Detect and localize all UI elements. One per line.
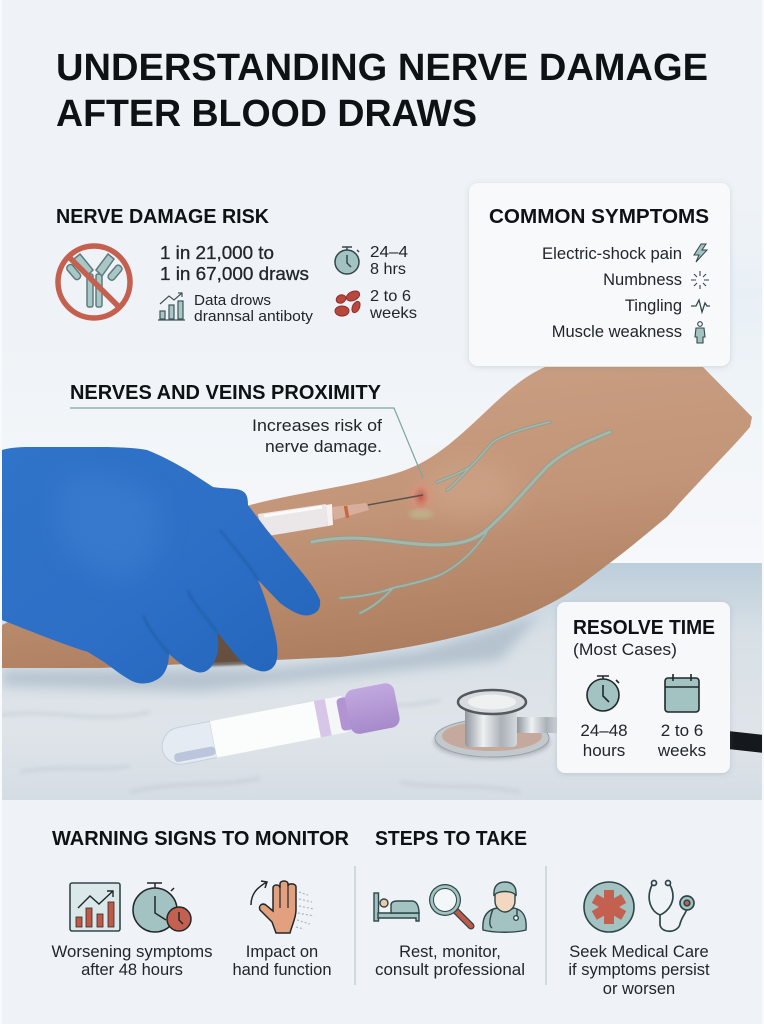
icon: numbness burst [691,271,709,289]
callout text: Increases risk of [252,417,382,435]
callout text: nerve damage. [265,438,382,456]
title [56,47,708,135]
arm [2,367,752,668]
symptom list: Numbness [603,271,682,289]
text: hand function: hand function [232,961,332,979]
statistic: incidence: 1 in 21,000 to [160,243,274,263]
icon: worsening chart [70,883,120,931]
callout heading: NERVES AND VEINS PROXIMITY [70,382,382,404]
text: rest monitor consult: Rest, monitor, [399,943,501,961]
statistic: incidence [160,243,309,284]
icon: antibody prohibited [58,246,130,318]
panel: steps to take [374,828,527,979]
statistic: incidence: 1 in 67,000 draws [160,264,309,284]
recovery text: weeks [369,305,417,322]
panel: nerve damage risk [56,206,417,325]
stethoscope on table [434,690,559,759]
icon: lightning [694,244,707,262]
icon: doctor [483,882,526,932]
callout text [252,417,382,456]
panel: warning signs to monitor [52,828,350,979]
title: UNDERSTANDING NERVE DAMAGE [56,47,708,89]
leader line [70,408,423,478]
icon: star of life [584,882,634,932]
photo: blood draw scene [2,367,762,800]
marble table [0,563,764,800]
subheading: (Most Cases) [573,640,677,659]
title: AFTER BLOOD DRAWS [56,93,477,135]
photo wall backdrop [0,340,764,570]
note text [194,293,314,325]
icon: tingling pulse [691,300,710,312]
stethoscope cord [730,731,762,753]
duration text: 24–4 [370,244,408,261]
icon: stopwatch [587,676,619,711]
syringe [258,495,423,537]
callout: nerves and veins proximity [70,382,423,478]
text: hand function [232,943,332,979]
icon: stethoscope [649,880,694,931]
text: hand function: Impact on [246,943,318,961]
heading: resolve time: RESOLVE TIME [573,617,715,639]
icon: rising bars [158,293,185,320]
divider [354,866,356,985]
text: worsening symptoms: after 48 hours [81,961,183,979]
icon: person [695,322,705,343]
symptom list: Tingling [625,297,682,315]
duration labels [580,721,706,760]
symptom list [542,245,682,341]
arm shadow on table [2,615,540,692]
duration labels: 24–48 [580,721,628,740]
icon: calendar [665,674,699,712]
symptom list: Electric-shock pain [542,245,682,263]
puncture glow [411,484,430,509]
note text: Data drows [194,293,271,309]
icon: hand [251,881,314,933]
icon: clock with alert clock [133,883,191,932]
panel: seek medical care [568,880,710,998]
icon: magnifier [429,884,471,926]
text: seek medical care [568,943,710,998]
icon: red blood cells [335,289,362,316]
symptom list: Muscle weakness [552,323,682,341]
heading: steps to take: STEPS TO TAKE [375,828,527,850]
heading: warning signs: WARNING SIGNS TO MONITOR [52,828,350,850]
text: rest monitor consult [375,943,525,979]
recovery text [369,288,417,322]
text: seek medical care: or worsen [603,980,675,998]
duration labels: hours [583,741,625,760]
icon: bed [374,893,419,921]
shirt sleeve [700,200,762,470]
duration text: 8 hrs [370,261,406,278]
text: worsening symptoms [52,943,212,979]
note text: drannsal antiboty [194,309,314,325]
icon: stopwatch [335,247,359,274]
heading: common symptoms: COMMON SYMPTOMS [489,206,709,228]
divider [545,866,547,985]
text: seek medical care: Seek Medical Care [569,943,709,961]
duration labels: 2 to 6 [661,721,703,740]
text: worsening symptoms: Worsening symptoms [52,943,212,961]
panel: resolve time [557,602,730,773]
duration text [370,244,408,278]
duration labels: weeks [657,741,706,760]
heading: nerve damage risk: NERVE DAMAGE RISK [56,206,270,228]
nerves and veins overlay [312,422,610,613]
text: rest monitor consult: consult professional [375,961,525,979]
panel: common symptoms [469,183,730,366]
gloved hand [2,447,320,683]
text: seek medical care: if symptoms persist [568,961,710,979]
recovery text: 2 to 6 [370,288,411,305]
blood collection tube [162,683,400,765]
